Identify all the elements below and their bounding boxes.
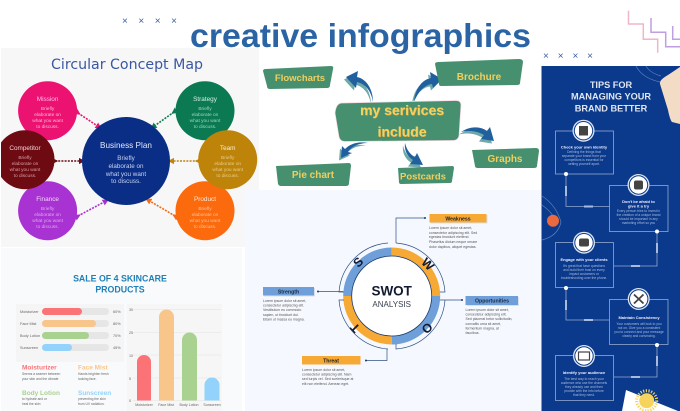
centre label: [371, 284, 413, 309]
node: mission: elaborate on: [34, 112, 61, 118]
tip: don't be afraid to give it a try: give it a try: [628, 204, 650, 208]
legend: face mist: Hands brighten fresh: [78, 372, 109, 376]
box: my services include: include: [378, 124, 427, 140]
chart: vertical bars: Body Lotion: [180, 403, 198, 407]
node: competitor: what you want: [10, 167, 41, 173]
chart: vertical bars: 10: [129, 354, 133, 358]
tip: check your own identity: Defining the things that: [567, 150, 601, 154]
chart: vertical bars: Moisturizer: [135, 403, 154, 407]
chart: horizontal progress bars: Body Lotion: [20, 334, 40, 338]
label: weakness: Weakness: [445, 216, 471, 222]
centre label: SWOT: [371, 284, 413, 298]
label: strength: [263, 287, 315, 322]
label: threat: Threat: [323, 358, 339, 364]
node: mission: what you want: [32, 118, 64, 124]
ring letters: T: [347, 320, 363, 335]
tip: don't be afraid to give it a try: Don't be afraid to: [622, 199, 655, 204]
chart: vertical bars: 25: [129, 331, 133, 335]
chart: horizontal progress bars: Moisturizer: [20, 310, 39, 314]
heading: sale of 4 skincare products: SALE OF 4 SKINCARE: [73, 274, 167, 284]
ring letters: W: [419, 255, 437, 274]
node: team: [198, 130, 257, 189]
ring letters: [347, 254, 437, 337]
label: strength: Etiam ut massa eu magna.: [263, 318, 305, 322]
chart: vertical bars: [127, 304, 222, 411]
legend: moisturizer: [22, 364, 60, 381]
label: strength: Vestibulum eu commodo: [263, 308, 301, 312]
node: strategy: Strategy: [193, 96, 218, 103]
decoration: crosses right: × × × ×: [543, 51, 593, 62]
node: business plan: to discuss.: [111, 178, 141, 185]
box: my services include: my serivices: [360, 102, 444, 118]
legend: moisturizer: your skin and the climate: [22, 377, 59, 381]
label: opportunities: Sed placerat tortor sollicitudin,: [466, 317, 512, 321]
label: opportunities: faucibus.: [466, 331, 480, 335]
box: graphs: Graphs: [487, 154, 523, 165]
node: product: to discuss.: [194, 224, 216, 230]
heading: tips: [571, 80, 651, 114]
node: business plan: elaborate on: [108, 163, 144, 170]
label: weakness: Phasellus dictum neque ornare: [429, 240, 477, 244]
legend: body lotion: Body Lotion: [22, 390, 60, 397]
panel: SWOT analysis: [245, 190, 542, 411]
panel: circular concept map: [0, 48, 259, 247]
tip: identify your audience: Identify your audience: [563, 370, 606, 375]
label: weakness: [429, 214, 488, 249]
chart: horizontal progress bars: Face Mist: [20, 322, 37, 326]
tip: maintain consistency: Maintain Consistency: [618, 315, 660, 320]
heading: sale of 4 skincare products: [73, 274, 167, 294]
arrows from centre: [341, 71, 494, 165]
node: finance: to discuss.: [36, 224, 59, 230]
tip: don't be afraid to give it a try: the creation of a unique brand: [617, 213, 661, 217]
legend: sunscreen: Sunscreen: [78, 390, 111, 397]
box: brochure: [435, 59, 523, 86]
node: strategy: to discuss.: [194, 124, 216, 130]
chart: vertical bars: Face Mist: [158, 403, 174, 407]
SWOT ring: [339, 243, 445, 349]
tip: check your own identity: Check your own identity: [561, 144, 608, 150]
connector lines: [318, 218, 462, 360]
decoration: crosses left: × × × ×: [122, 16, 177, 27]
box: graphs: [472, 148, 539, 168]
tip: maintain consistency: [610, 288, 668, 344]
connector dots: [564, 172, 659, 347]
node: strategy: [176, 81, 234, 140]
chart: vertical bars: 5: [129, 377, 131, 381]
heading: circular concept map: Circular Concept Map: [51, 57, 203, 73]
node: product: Product: [194, 196, 216, 203]
node: product: elaborate on: [192, 212, 219, 218]
node: competitor: Briefly: [18, 155, 32, 161]
label: weakness: consectetur adipiscing elit. Sed: [429, 231, 477, 235]
node: strategy: what you want: [190, 118, 221, 124]
node: finance: Finance: [36, 196, 59, 203]
label: opportunities: Opportunities: [475, 298, 509, 304]
decoration: orange dot with arcs: [542, 196, 561, 240]
node: mission: Briefly: [41, 106, 55, 112]
legend: sunscreen: from UV radiation.: [78, 402, 105, 406]
decoration: top arcs: [636, 66, 661, 82]
tip: identify your audience: provide with the info before: [564, 389, 604, 393]
node: business plan: Business Plan: [100, 141, 152, 150]
chart: horizontal progress bars: 60%: [113, 310, 121, 314]
node: team: what you want: [212, 167, 244, 173]
box: my services include: include: [377, 124, 427, 140]
tip: identify your audience: that they need.: [573, 393, 595, 397]
panel: skincare sales: [1, 248, 242, 411]
box: pie chart: Pie chart: [292, 170, 335, 181]
node: competitor: [0, 128, 54, 192]
heading: sale of 4 skincare products: PRODUCTS: [95, 284, 145, 294]
chart: horizontal progress bars: 80%: [113, 322, 121, 326]
label: strength: sapien, ut tincidunt dui.: [263, 313, 299, 317]
legend: moisturizer: Moisturizer: [22, 364, 57, 372]
node: team: Team: [220, 145, 236, 152]
connector lines: [566, 174, 657, 377]
ring letters: O: [419, 320, 436, 337]
label: opportunities: [466, 296, 519, 335]
heading: tips: MANAGING YOUR: [571, 92, 651, 102]
tip: engage with your clients: and build their trust on every: [563, 268, 605, 272]
label: opportunities: convallis urna sit amet,: [466, 322, 501, 326]
chart: horizontal progress bars: [16, 304, 124, 362]
node: product: [176, 181, 234, 240]
tip: engage with your clients: It's great that have questions: [563, 264, 605, 268]
label: weakness: dolor dapibus, aliquet egestas.: [429, 245, 477, 249]
tip: maintain consistency: clearly and convincing.: [622, 334, 656, 338]
tip: maintain consistency: Your customers will look to you: [616, 322, 662, 326]
node: product: Briefly: [198, 206, 212, 212]
node: business plan: Briefly: [117, 155, 136, 162]
tip: engage with your clients: impact customers or: [569, 272, 600, 276]
node: mission: Mission: [37, 96, 59, 103]
legend: body lotion: heal the skin: [22, 402, 41, 406]
label: weakness: egestas tincidunt eleifend.: [429, 235, 469, 239]
node: business plan: [82, 117, 170, 205]
legend: face mist: Face Mist: [78, 364, 108, 372]
connector dash marks: [565, 186, 658, 378]
label: opportunities: Lorem ipsum dolor sit amet,: [466, 308, 509, 312]
node: business plan: what you want: [105, 171, 146, 178]
node: team: elaborate on: [214, 161, 241, 167]
chart: horizontal progress bars: 45%: [113, 346, 121, 350]
label: threat: [302, 356, 360, 386]
tip: don't be afraid to give it a try: Every person tries to invest in: [617, 209, 660, 213]
node: mission: to discuss.: [36, 124, 59, 130]
chart: vertical bars: Sunscreen: [203, 403, 221, 407]
legend: face mist: [78, 364, 109, 381]
tip: check your own identity: separate your brand from your: [562, 154, 607, 158]
arrows between circles: [55, 112, 198, 216]
label: strength: Lorem ipsum dolor sit amet,: [263, 299, 306, 303]
ring letters: S: [350, 254, 366, 270]
node: team: Briefly: [221, 155, 235, 161]
heading: tips: BRAND BETTER: [575, 104, 648, 114]
node: competitor: to discuss.: [14, 173, 36, 179]
tip: maintain consistency: you to connect and your message: [614, 330, 664, 334]
node: finance: [18, 181, 77, 240]
box: flowcharts: Flowcharts: [275, 73, 325, 84]
legend: sunscreen: [78, 390, 111, 406]
box: postcards: Postcards: [400, 172, 446, 182]
tip: identify your audience: they already use and then: [565, 385, 603, 389]
label: threat: consectetur adipiscing elit. Nam: [302, 372, 351, 376]
tip: identify your audience: [556, 345, 614, 400]
centre label: ANALYSIS: [372, 300, 411, 309]
tip: identify your audience: The best way to reach your: [564, 377, 605, 381]
tip: check your own identity: competitors is essential for: [564, 158, 604, 162]
node: strategy: elaborate on: [192, 112, 219, 118]
label: weakness: Lorem ipsum dolor sit amet,: [429, 226, 472, 230]
box: pie chart: [276, 163, 351, 186]
tip: engage with your clients: [556, 232, 614, 288]
heading: tips: TIPS FOR: [590, 80, 633, 90]
node: team: to discuss.: [216, 173, 239, 179]
legend: moisturizer: Seems a seamer between: [22, 372, 60, 376]
node: competitor: Competitor: [9, 145, 41, 152]
box: postcards: [398, 166, 454, 184]
box: my services include: [335, 100, 461, 142]
panel: brand tips: [542, 66, 680, 411]
chart: horizontal progress bars: 70%: [113, 334, 121, 338]
box: brochure: Brochure: [457, 72, 502, 83]
legend: face mist: looking face.: [78, 377, 97, 381]
panel: services mind map: [263, 59, 539, 186]
node: product: what you want: [190, 218, 221, 224]
tip: engage with your clients: troubleshooting over the phone.: [561, 276, 607, 280]
tip: don't be afraid to give it a try: marketing effort so you: [622, 221, 655, 225]
tip: maintain consistency: not on. Give you a consistent: [618, 326, 660, 330]
label: threat: Lorem ipsum dolor sit amet,: [302, 368, 345, 372]
chart: vertical bars: 0: [129, 399, 131, 403]
label: strength: Strength: [278, 290, 299, 296]
legend: sunscreen: preventing the skin: [78, 397, 106, 401]
box: my services include: my serivices: [360, 102, 445, 118]
decoration: bottom sun shape: [622, 390, 678, 411]
legend: body lotion: [22, 390, 60, 406]
decoration: zigzag lines: [628, 11, 680, 53]
title: creative infographics: [190, 17, 531, 54]
label: opportunities: consectetur adipiscing elit.: [466, 312, 507, 316]
tip: engage with your clients: Engage with your clients: [560, 257, 608, 262]
label: threat: sed turpis vel. Sed scelerisque at: [302, 377, 353, 381]
chart: vertical bars: 30: [129, 308, 133, 312]
node: mission: [18, 81, 77, 140]
node: strategy: Briefly: [198, 106, 212, 112]
decoration: top corner shape: [660, 67, 680, 124]
tip: don't be afraid to give it a try: should be important in any: [619, 217, 658, 221]
tip: check your own identity: setting yourself apart.: [568, 162, 600, 166]
tip: check your own identity: [556, 120, 614, 174]
node: finance: Briefly: [41, 206, 55, 212]
arrows from centre: shadows: [339, 74, 492, 168]
label: threat: elit non eleifend. Aenean eget.: [302, 382, 349, 386]
label: strength: consectetur adipiscing elit.: [263, 304, 304, 308]
legend: body lotion: to hydrate and or: [22, 397, 48, 401]
node: finance: what you want: [32, 218, 64, 224]
box: flowcharts: [263, 66, 333, 89]
node: competitor: elaborate on: [12, 161, 39, 167]
label: opportunities: fermentum magna, at: [466, 326, 499, 330]
node: finance: elaborate on: [34, 212, 61, 218]
chart: horizontal progress bars: Sunscreen: [20, 346, 38, 350]
tip: identify your audience: audience who use the channels: [561, 381, 607, 385]
tip: don't be afraid to give it a try: [610, 174, 668, 232]
